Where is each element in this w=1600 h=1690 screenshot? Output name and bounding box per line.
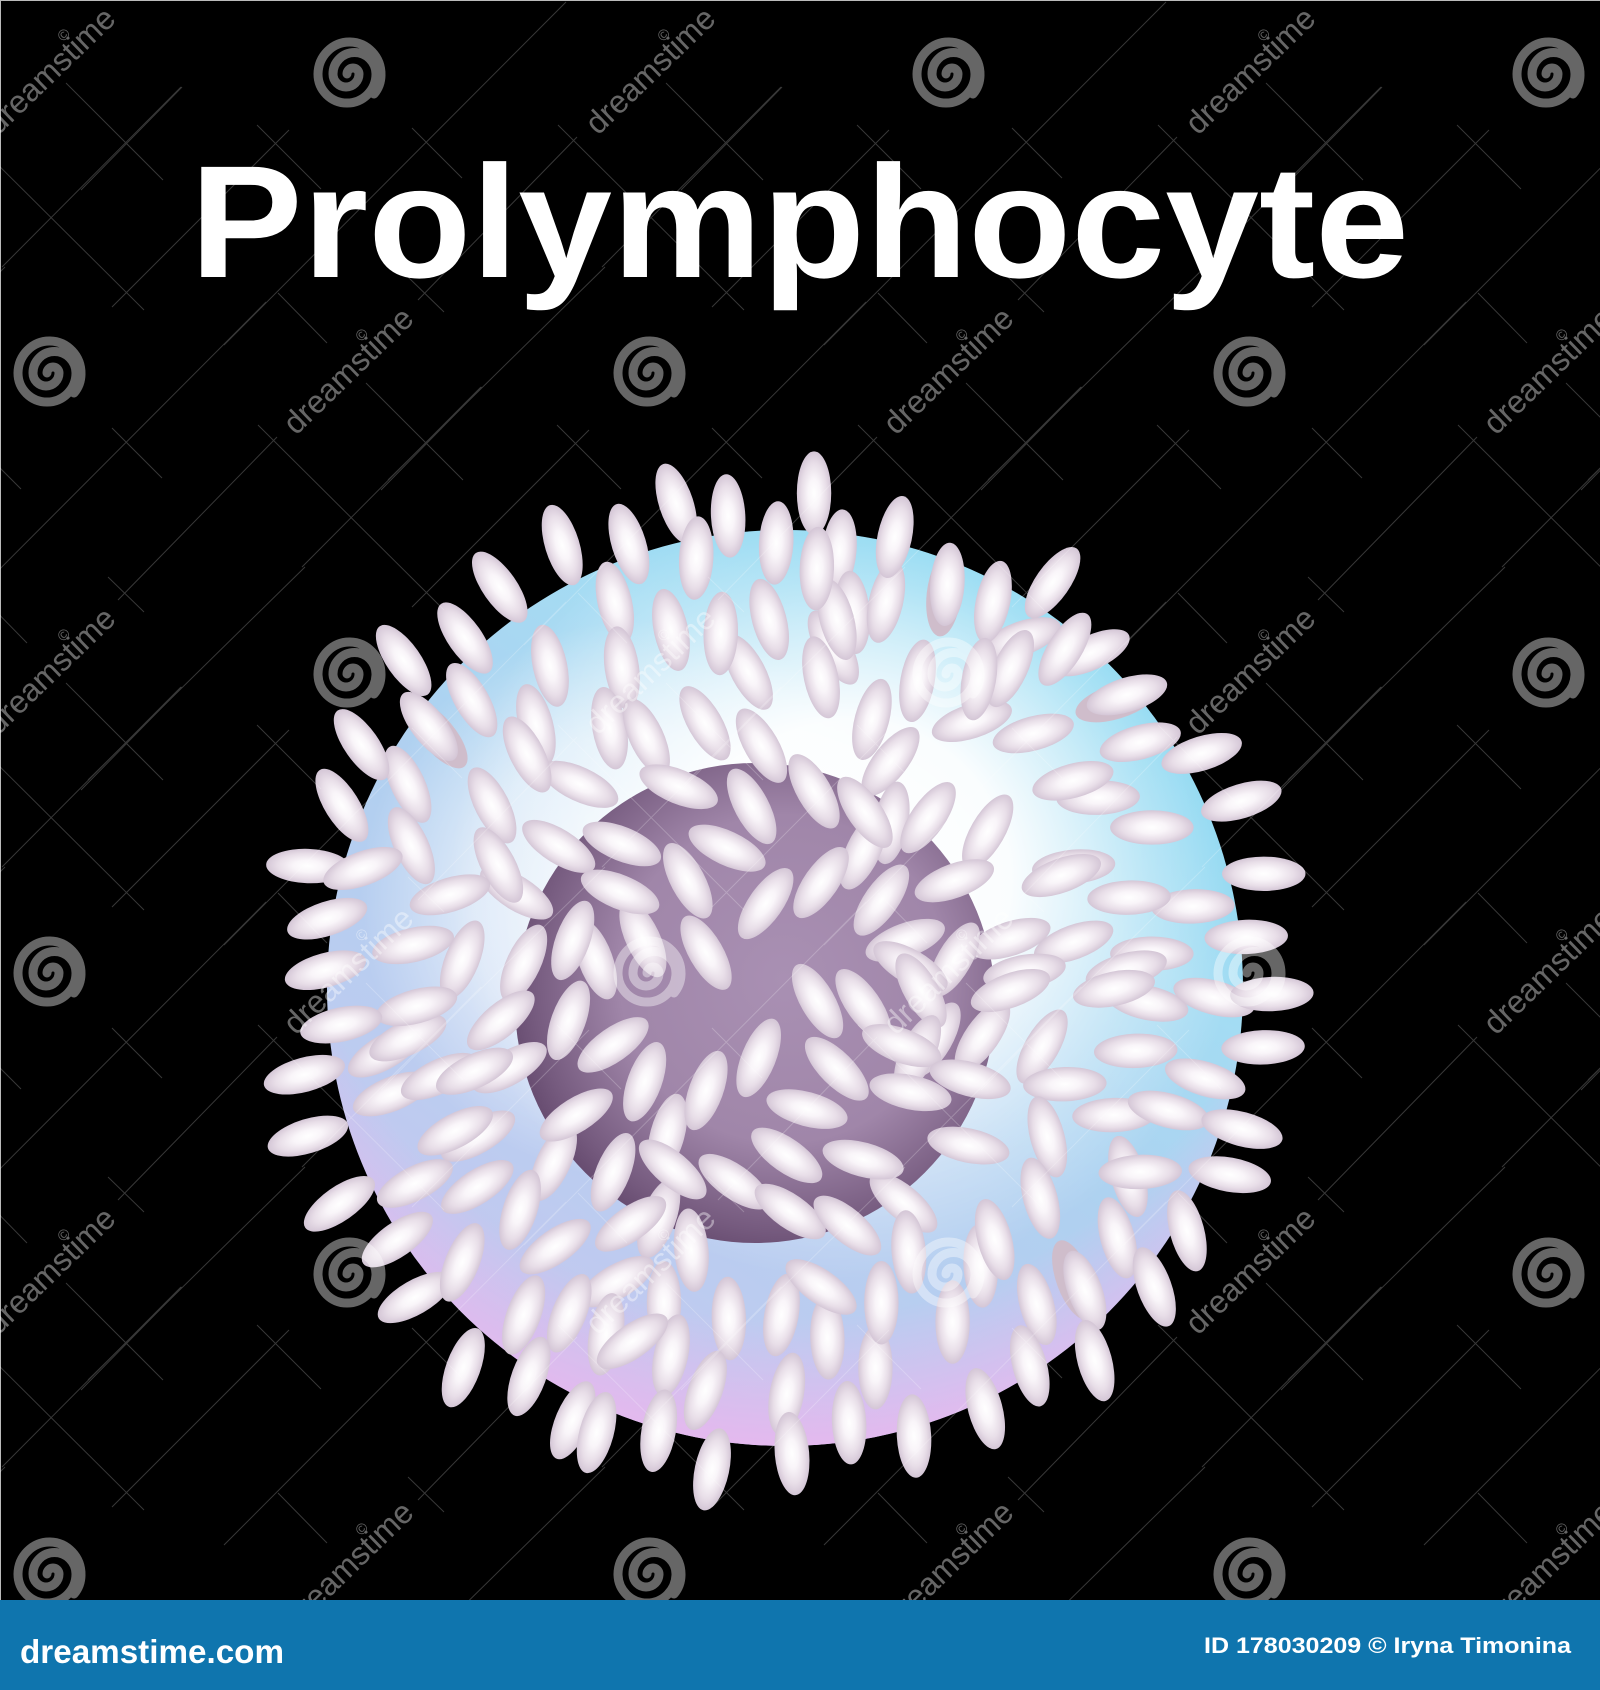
granules: lower left (260, 975, 834, 1514)
footer credit: ID 178030209 © Iryna Timonina (1204, 1633, 1572, 1658)
footer bar (0, 1600, 1600, 1690)
granules: upper right (778, 451, 1306, 1004)
cytoplasm (327, 530, 1243, 1446)
cell: prolymphocyte (260, 451, 1314, 1514)
footer logo text: dreamstime.com (20, 1633, 284, 1670)
nucleus (515, 763, 995, 1243)
granules: upper left (266, 459, 804, 1008)
title: Prolymphocyte (190, 132, 1409, 311)
granules: lower right (762, 946, 1314, 1479)
